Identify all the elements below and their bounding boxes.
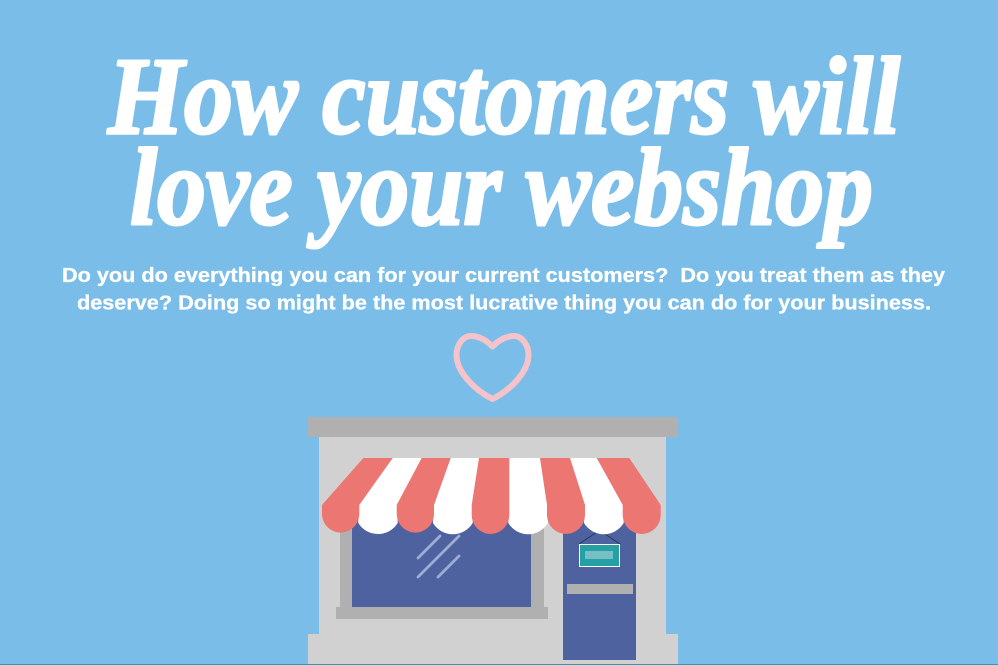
subtitle: Do you do everything you can for your current customers? Do you treat them as they bbox=[62, 264, 946, 287]
subtitle bbox=[62, 264, 946, 314]
awning bbox=[322, 458, 661, 534]
title bbox=[107, 35, 900, 248]
door bbox=[563, 515, 636, 660]
door sign bbox=[579, 532, 620, 566]
title: How customers will bbox=[107, 35, 900, 157]
red stripes bbox=[322, 458, 661, 534]
white stripes bbox=[358, 458, 624, 534]
building base bbox=[308, 634, 678, 665]
title: love your webshop bbox=[130, 126, 873, 248]
building wall bbox=[319, 437, 666, 637]
subtitle: deserve? Doing so might be the most lucrative thing you can do for your business. bbox=[77, 292, 931, 314]
icon: heart bbox=[456, 336, 528, 399]
roof bbox=[308, 417, 678, 437]
window bbox=[336, 515, 548, 619]
storefront bbox=[308, 417, 678, 665]
